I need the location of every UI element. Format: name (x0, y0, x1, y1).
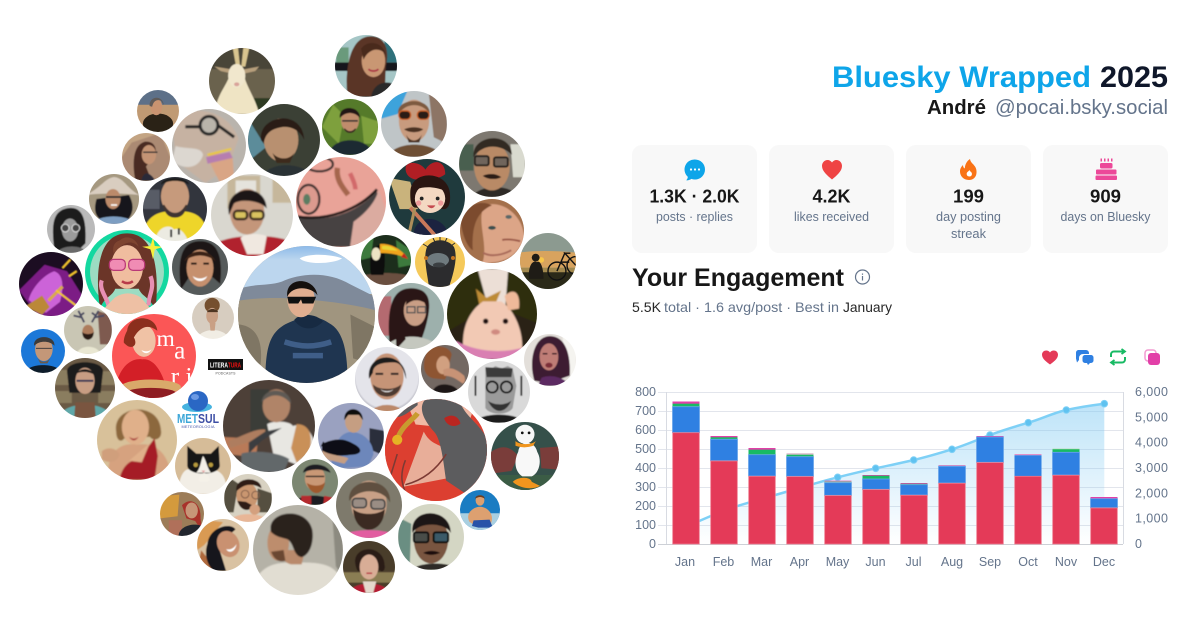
avatar: woman in autumn leaves (160, 492, 204, 536)
avatar: Spock with black cat (311, 396, 391, 476)
left axis labels: 600 (635, 423, 656, 437)
avatar: main profile photo, man with sunglasses and mountains (238, 246, 375, 383)
stat label: days on Bluesky (1060, 210, 1151, 224)
avatar: man seen from behind (253, 505, 343, 595)
panel: posts and replies stat (632, 145, 757, 253)
avatar: man with orange sunglasses (381, 91, 447, 157)
icon: reply legend (1076, 350, 1094, 365)
avatar: smiling woman (172, 239, 228, 295)
left axis labels: 800 (635, 385, 656, 399)
avatar: woman with pie and mari text: r i (171, 364, 192, 391)
avatar: woman with updo (192, 297, 234, 339)
avatar: man in yellow shirt (143, 177, 207, 241)
left axis labels: 700 (635, 404, 656, 418)
legend icons (1042, 349, 1160, 365)
panel: days on Bluesky stat (1043, 145, 1168, 253)
avatar: face lying sideways with glasses (296, 157, 386, 247)
logo: MetSul: MET (177, 411, 198, 426)
bar: Jan (672, 402, 700, 544)
engagement summary: 5.5K (632, 299, 662, 315)
stat label: likes received (794, 210, 869, 224)
bar: Aug (938, 465, 966, 544)
avatar: vintage pinup woman (97, 400, 177, 480)
avatar: woman with pie and mari text (112, 314, 196, 398)
avatar: man with thick glasses (391, 497, 471, 577)
user name and handle: @pocai.bsky.social (995, 97, 1168, 119)
logo: Literatura: PODCASTS (216, 372, 236, 376)
right axis labels: 3,000 (1135, 461, 1168, 475)
month labels: Jan (675, 555, 695, 569)
right axis labels: 2,000 (1135, 486, 1168, 500)
avatar: Kiki anime (389, 159, 465, 235)
logo: Literatura: TURA (228, 360, 241, 370)
month labels: Jul (906, 555, 921, 569)
title: 2025 (1100, 61, 1168, 94)
icon: repost legend (1111, 349, 1125, 365)
stat value: 909 (1090, 186, 1121, 206)
stat label: day posting (936, 210, 1001, 224)
month labels: Aug (941, 555, 963, 569)
right axis labels: 1,000 (1135, 512, 1168, 526)
left axis labels (635, 385, 656, 551)
title: Bluesky Wrapped (832, 61, 1091, 94)
avatar: bearded man with glasses and pink shirt (329, 465, 409, 545)
panel: likes received stat (769, 145, 894, 253)
chart grid and axes (658, 392, 1124, 544)
avatar: toucan (361, 235, 411, 285)
month labels: Sep (979, 555, 1001, 569)
left axis labels: 500 (635, 442, 656, 456)
icon: like legend (1042, 350, 1058, 364)
avatar: man in car (248, 104, 320, 176)
avatar: man on blue background (21, 329, 65, 373)
stat value: 1.3K · 2.0K (650, 186, 740, 206)
avatar: woman with hat (89, 174, 139, 224)
right axis labels: 4,000 (1135, 436, 1168, 450)
avatar: woman with bookshelf (55, 358, 115, 418)
avatar: smiling woman with cap (197, 519, 249, 571)
avatar: woman pouting (519, 329, 581, 391)
month labels (675, 555, 1115, 569)
logo: MetSul: METEOROLOGIA (182, 425, 215, 429)
month labels: Mar (751, 555, 772, 569)
right axis labels: 6,000 (1135, 385, 1168, 399)
bar: Jun (862, 475, 890, 544)
heading: Your Engagement: Your Engagement (632, 264, 845, 292)
logo: Literatura: LITERA (210, 360, 228, 370)
month labels: Oct (1018, 555, 1038, 569)
avatar: deer antlers man (64, 306, 112, 354)
avatar: woman with curly hair (122, 133, 170, 181)
avatar: tuxedo cat (175, 438, 231, 494)
month labels: Dec (1093, 555, 1115, 569)
avatar: illustrated woman with pink glasses (85, 230, 169, 314)
left axis labels: 300 (635, 480, 656, 494)
bar: Jul (900, 483, 928, 544)
left axis labels: 200 (635, 499, 656, 513)
bar: Oct (1014, 454, 1042, 544)
avatar: hamster with party hat (447, 269, 537, 359)
avatar: woman with pie and mari text: a (174, 338, 185, 365)
logo: MetSul (177, 391, 219, 429)
avatar: blended woman portrait (460, 199, 524, 263)
avatar: man with beard, headshot (355, 347, 419, 411)
left axis labels: 100 (635, 518, 656, 532)
left axis labels: 400 (635, 461, 656, 475)
combo chart: monthly engagement (635, 385, 1168, 569)
icon: heart (822, 160, 842, 180)
engagement summary (632, 299, 892, 315)
stat label: streak (951, 227, 987, 241)
avatar: cartoon swimmer (456, 486, 504, 534)
icon: speech bubble (685, 159, 705, 180)
bar: Sep (976, 436, 1004, 544)
icon: birthday cake (1096, 158, 1117, 180)
panel: day posting streak stat (906, 145, 1031, 253)
avatar: black and white stencil man (462, 355, 536, 429)
bar: Mar (748, 448, 776, 544)
avatar: emu (415, 237, 465, 287)
month labels: May (826, 555, 850, 569)
month labels: Jun (865, 555, 886, 569)
avatar: woman with pie and mari text: m (157, 326, 175, 352)
avatar: woman eating (421, 345, 469, 393)
avatar: man in black shirt in garden (322, 99, 378, 155)
month labels: Feb (713, 555, 734, 569)
avatar: guitarist neon (19, 252, 83, 316)
engagement summary: total · 1.6 avg/post · Best in (664, 299, 839, 315)
stat value: 4.2K (812, 186, 850, 206)
bars: monthly stacks (672, 402, 1118, 544)
user name and handle: André (927, 97, 986, 119)
bar: Feb (710, 436, 738, 544)
avatar: woman with glasses on patterned chair (378, 283, 444, 349)
avatar: bearded man with cap (287, 454, 343, 510)
bar: Nov (1052, 449, 1080, 544)
avatar: woman in red jacket with curly hair (338, 536, 400, 598)
right axis labels: 5,000 (1135, 410, 1168, 424)
month labels: Apr (790, 555, 809, 569)
avatar: man with round glasses eating (224, 474, 272, 522)
bar: May (824, 481, 852, 544)
bar: Apr (786, 453, 814, 544)
left axis labels: 0 (649, 537, 656, 551)
stat label (936, 210, 1001, 241)
icon: quote legend (1145, 350, 1160, 365)
logo: MetSul: SUL (198, 411, 219, 426)
stat value: 199 (953, 186, 984, 206)
icon: flame (960, 159, 977, 180)
avatar: man at sunset (137, 90, 179, 132)
logo: Literatura (208, 359, 243, 376)
stat label: posts · replies (656, 210, 733, 224)
avatar: goat (209, 48, 275, 114)
avatar: man with glasses and mustache (459, 131, 525, 197)
avatar: Donald Duck (484, 415, 566, 497)
line: cumulative engagement (685, 400, 1108, 527)
bar: Dec (1090, 497, 1118, 544)
month labels: Nov (1055, 555, 1078, 569)
avatar: bearded man with round glasses (172, 109, 246, 183)
avatar: man on motorbike (223, 380, 315, 472)
engagement summary: January (843, 299, 892, 315)
icon: info (856, 270, 870, 284)
avatar: man in red jacket (211, 174, 293, 256)
right axis labels (1135, 385, 1168, 551)
right axis labels: 0 (1135, 537, 1142, 551)
avatar: illustrated woman in red (375, 389, 497, 511)
avatar: woman with dark hair and city (335, 35, 397, 97)
avatar: sunset with bicycle (520, 233, 576, 289)
avatar: black and white woman (47, 205, 95, 253)
area: cumulative engagement fill (685, 404, 1104, 544)
avatar cluster (13, 29, 585, 604)
